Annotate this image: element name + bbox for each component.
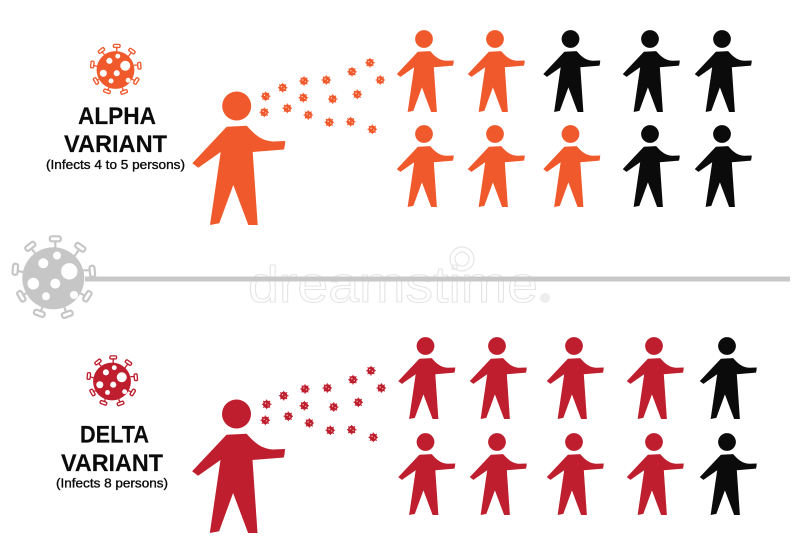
- icon: alpha virus particles: [260, 58, 385, 134]
- icon: delta virus: [87, 356, 138, 406]
- group: alpha people top row: [397, 30, 752, 112]
- icon: alpha spreader person: [192, 92, 285, 225]
- group: delta people top row: [398, 337, 757, 419]
- text: delta infection count: (Infects 8 persons): [56, 476, 168, 490]
- icon: delta virus particles: [260, 366, 386, 442]
- text: alpha infection count: (Infects 4 to 5 persons): [46, 157, 185, 172]
- watermark: dreamstime: [248, 256, 538, 313]
- heading: alpha variant: ALPHA: [78, 103, 156, 130]
- icon: delta spreader person: [192, 400, 285, 533]
- heading: delta variant: [61, 422, 163, 477]
- icon: alpha virus: [91, 44, 141, 95]
- divider line: [85, 276, 790, 282]
- group: alpha people bottom row: [397, 125, 752, 207]
- panel: alpha variant: [46, 30, 752, 225]
- panel: delta variant: [56, 337, 757, 533]
- group: delta people bottom row: [398, 433, 757, 515]
- heading: alpha variant: [64, 103, 167, 158]
- heading: delta variant: VARIANT: [61, 450, 163, 477]
- icon: grey virus: [12, 236, 95, 319]
- heading: delta variant: DELTA: [80, 422, 149, 448]
- heading: alpha variant: VARIANT: [64, 131, 167, 158]
